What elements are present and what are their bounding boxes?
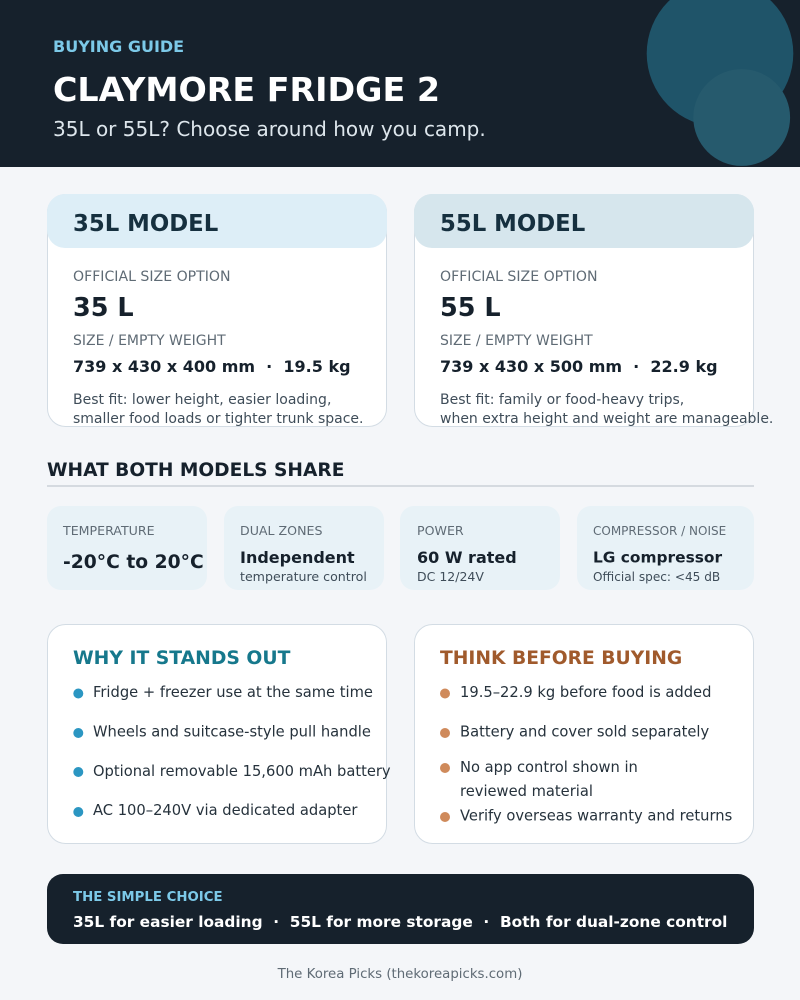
stat card: dual zones xyxy=(224,506,384,590)
pro: battery: Optional removable 15,600 mAh battery xyxy=(93,763,391,780)
callout label: THE SIMPLE CHOICE xyxy=(73,890,223,905)
decorative large circle xyxy=(647,0,793,127)
header banner xyxy=(0,0,800,167)
eyebrow: buying guide: BUYING GUIDE xyxy=(53,37,184,56)
35L dimensions value: 739 x 430 x 400 mm · 19.5 kg xyxy=(73,357,351,376)
panel: think before buying xyxy=(414,624,754,844)
stat card: compressor and noise: LG compressor xyxy=(593,548,722,566)
35L heading: 35L MODEL xyxy=(73,211,218,237)
35L best fit note: Best fit: lower height, easier loading, xyxy=(73,392,331,408)
35L card header xyxy=(47,194,387,248)
panel: 35L model xyxy=(47,194,387,427)
pros heading: WHY IT STANDS OUT xyxy=(73,648,291,669)
stat card: power: 60 W rated xyxy=(417,548,517,567)
stat card: temperature xyxy=(47,506,207,590)
35L size label: OFFICIAL SIZE OPTION xyxy=(73,269,231,285)
stat card: temperature: TEMPERATURE xyxy=(62,523,155,538)
stat card: dual zones: DUAL ZONES xyxy=(240,523,322,538)
35L size value: 35 L xyxy=(73,293,134,323)
con: no app control: reviewed material xyxy=(460,783,593,800)
cons heading: THINK BEFORE BUYING xyxy=(440,648,682,669)
55L best fit note xyxy=(440,392,773,427)
pro: simultaneous use: Fridge + freezer use at the same time xyxy=(93,684,373,701)
title: CLAYMORE FRIDGE 2 xyxy=(53,70,440,109)
55L best fit note: Best fit: family or food-heavy trips, xyxy=(440,392,684,408)
section heading: what both models share: WHAT BOTH MODELS SHARE xyxy=(47,460,344,481)
35L dimensions label: SIZE / EMPTY WEIGHT xyxy=(73,333,226,349)
panel: why it stands out xyxy=(48,624,391,844)
con: no app control xyxy=(440,759,638,800)
stat card: compressor and noise xyxy=(577,506,754,590)
55L size label: OFFICIAL SIZE OPTION xyxy=(440,269,598,285)
stat card: temperature: -20°C to 20°C xyxy=(63,552,204,573)
con: warranty: Verify overseas warranty and returns xyxy=(460,808,732,824)
stat card: power: DC 12/24V xyxy=(417,569,484,584)
35L best fit note: smaller food loads or tighter trunk space. xyxy=(73,411,363,427)
stat card: compressor and noise: Official spec: <45 dB xyxy=(593,570,720,584)
55L size value: 55 L xyxy=(440,293,501,323)
callout: the simple choice xyxy=(47,874,754,944)
stat card: power: POWER xyxy=(417,523,464,538)
footer credit: The Korea Picks (thekoreapicks.com) xyxy=(277,967,522,982)
35L best fit note xyxy=(73,392,363,427)
decorative small circle xyxy=(693,69,790,166)
55L dimensions value: 739 x 430 x 500 mm · 22.9 kg xyxy=(440,357,718,376)
55L dimensions label: SIZE / EMPTY WEIGHT xyxy=(440,333,593,349)
pro: AC adapter: AC 100–240V via dedicated adapter xyxy=(93,802,358,819)
callout message: 35L for easier loading · 55L for more storage · Both for dual-zone control xyxy=(73,913,727,931)
stat card: dual zones: temperature control xyxy=(240,569,367,584)
55L card header xyxy=(414,194,754,248)
con: weight: 19.5–22.9 kg before food is added xyxy=(460,684,711,701)
con: no app control: No app control shown in xyxy=(460,759,638,776)
panel: 55L model xyxy=(414,194,773,427)
subtitle: 35L or 55L? Choose around how you camp. xyxy=(53,117,486,141)
55L best fit note: when extra height and weight are manageable. xyxy=(440,411,773,427)
stat card: compressor and noise: COMPRESSOR / NOISE xyxy=(593,524,726,538)
stat card: dual zones: Independent xyxy=(240,548,355,567)
stat card: power xyxy=(400,506,560,590)
pro: wheels and handle: Wheels and suitcase-style pull handle xyxy=(93,724,371,740)
con: accessories sold separately: Battery and cover sold separately xyxy=(460,724,709,740)
55L heading: 55L MODEL xyxy=(440,211,585,237)
